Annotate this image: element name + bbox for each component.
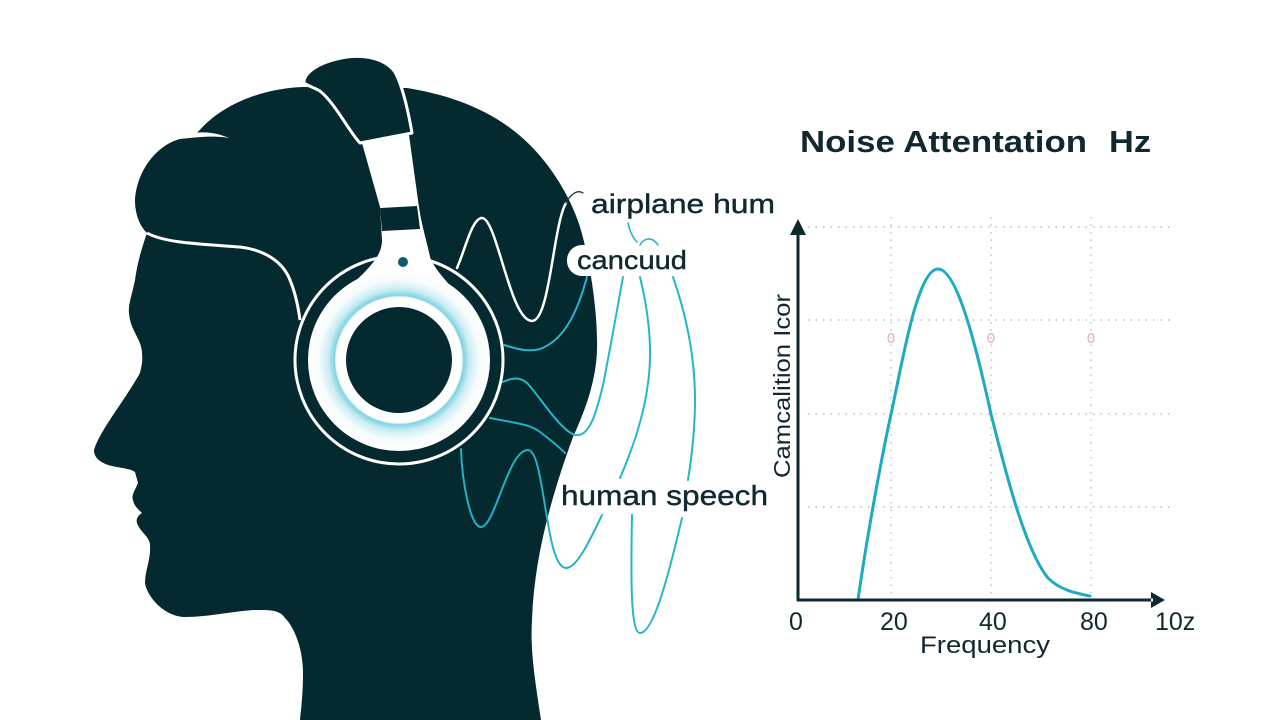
wave tail near label xyxy=(566,192,583,203)
cyan wave 2 xyxy=(503,277,623,435)
x tick labels: 80 xyxy=(1080,608,1108,636)
sound waves xyxy=(457,192,695,633)
cyan short arc xyxy=(640,239,658,245)
x tick labels xyxy=(789,608,1195,636)
x tick labels: 40 xyxy=(979,608,1007,636)
pill background xyxy=(567,245,627,276)
ear cup glowing ring xyxy=(308,269,490,451)
ear cup inner white ring xyxy=(341,302,457,418)
x axis label: Frequency xyxy=(920,632,1050,659)
cyan short stroke xyxy=(628,223,637,242)
headband dark strip xyxy=(380,206,420,231)
cyan wave 7 xyxy=(631,515,682,633)
x tick labels: 0 xyxy=(789,608,803,636)
cyan wave 3 xyxy=(490,418,565,453)
white wave: airplane hum xyxy=(457,203,566,321)
outer ear cup xyxy=(295,256,503,464)
x tick labels: 10z xyxy=(1155,608,1195,636)
head and hair shape xyxy=(94,87,597,720)
pill text: cancuud xyxy=(577,245,687,275)
headband pad xyxy=(304,56,412,143)
cyan curve xyxy=(858,269,1090,600)
y axis xyxy=(790,219,806,601)
headband xyxy=(335,135,477,313)
hairline xyxy=(147,233,300,320)
x tick labels: 20 xyxy=(880,608,908,636)
label: human speech: human speech xyxy=(561,480,768,511)
label: airplane hum: airplane hum xyxy=(591,189,775,219)
headband button xyxy=(398,257,408,267)
chart: attenuation curve xyxy=(769,217,1195,659)
chart title: Hz xyxy=(1109,124,1151,159)
y axis label: Camcalition Icor xyxy=(769,294,795,478)
pink markers xyxy=(888,334,1094,342)
cyan wave 5 xyxy=(620,277,650,478)
label: cancuud pill xyxy=(567,245,687,276)
cyan wave 1 xyxy=(504,277,587,350)
x axis xyxy=(797,592,1165,608)
chart title: Noise Attentation xyxy=(800,124,1087,159)
cyan wave 4 xyxy=(461,449,602,568)
hair slit xyxy=(180,132,229,139)
head silhouette with headphones xyxy=(94,56,597,720)
grid lines xyxy=(808,217,1175,595)
cyan wave 6 xyxy=(673,277,695,480)
